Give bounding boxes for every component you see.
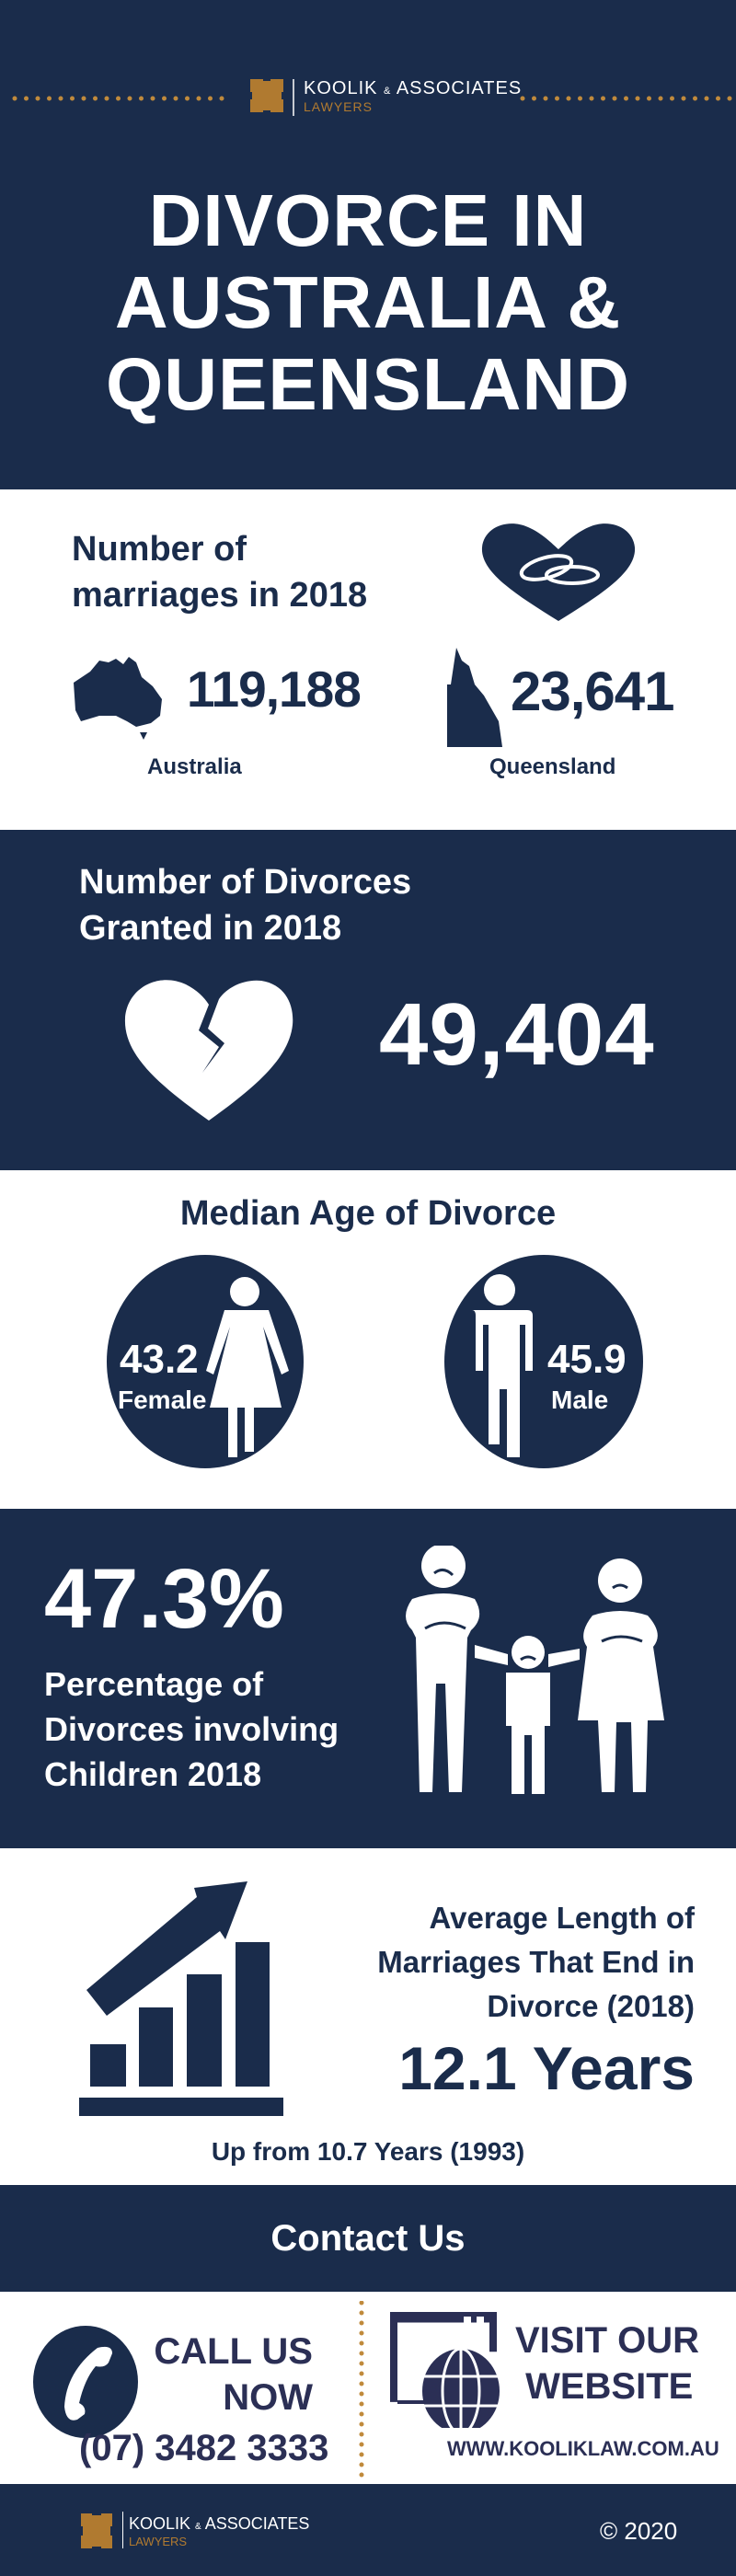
icon: bar chart with arrow [79,1881,283,2116]
divider dotted [359,2301,364,2477]
panel: children [0,1509,736,1848]
text: call us now: NOW [223,2377,313,2418]
stat: queensland: 23,641 [511,661,674,722]
panel: contact heading [0,2185,736,2292]
icon: broken heart [125,980,293,1121]
panel: contact details [33,2301,719,2477]
title [106,179,630,425]
title: QUEENSLAND [106,343,630,425]
circle: male: Male [551,1386,608,1414]
stat: australia: 119,188 [187,661,361,718]
logo with dotted lines: KOOLIK & ASSOCIATES [304,78,522,98]
text: up from: Up from 10.7 Years (1993) [212,2137,524,2166]
panel: contact heading: Contact Us [270,2218,466,2259]
text: visit our website: VISIT OUR [515,2320,699,2361]
text: call us now [154,2331,313,2418]
text: percentage involving children: Percentage of [44,1665,263,1703]
icon: australia map [74,657,162,740]
text: phone number: (07) 3482 3333 [79,2428,328,2468]
footer logo [81,2512,309,2548]
text: average length heading [377,1901,696,2023]
label: australia: Australia [147,754,242,779]
panel: marriages [72,523,674,779]
heading: divorces granted: Number of Divorces [79,863,411,902]
circle: female [107,1255,304,1468]
heading: median age: Median Age of Divorce [180,1194,556,1233]
stat: 12.1 years: 12.1 Years [398,2034,695,2102]
text: percentage involving children [44,1665,339,1793]
text: percentage involving children: Children 2018 [44,1755,261,1793]
logo with dotted lines: LAWYERS [304,99,373,114]
stat: divorces: 49,404 [379,985,655,1084]
title: AUSTRALIA & [115,261,621,343]
circle: female: 43.2 [120,1337,199,1382]
circle: male [444,1255,643,1468]
panel: average length [79,1881,696,2166]
logo with dotted lines [13,78,732,116]
text: call us now: CALL US [154,2331,313,2372]
text: url: WWW.KOOLIKLAW.COM.AU [447,2437,719,2460]
panel: footer [0,2484,736,2576]
heading: number of marriages [72,530,367,615]
text: average length heading: Divorce (2018) [487,1989,695,2023]
heading: number of marriages: marriages in 2018 [72,576,367,615]
panel: median age [107,1194,643,1468]
text: visit our website [515,2320,699,2407]
footer logo: LAWYERS [129,2535,187,2548]
icon: phone [33,2326,138,2438]
copyright: © 2020 [600,2517,677,2545]
heading: divorces granted: Granted in 2018 [79,909,341,948]
icon: website globe [390,2312,500,2428]
text: average length heading: Average Length of [430,1901,695,1935]
icon: queensland map [447,648,502,747]
stat: 47.3%: 47.3% [44,1552,284,1646]
icon: family [406,1546,664,1794]
circle: female: Female [118,1386,206,1414]
heading: divorces granted [79,863,411,948]
panel: divorces [0,830,736,1170]
text: visit our website: WEBSITE [525,2366,693,2407]
circle: male: 45.9 [547,1337,627,1382]
title: DIVORCE IN [149,179,587,261]
text: percentage involving children: Divorces involving [44,1710,339,1748]
heading: number of marriages: Number of [72,530,247,569]
text: average length heading: Marriages That End in [377,1945,695,1979]
icon: heart with rings [482,523,635,621]
panel: header [0,0,736,489]
label: queensland: Queensland [489,754,615,779]
footer logo: KOOLIK & ASSOCIATES [129,2514,309,2533]
